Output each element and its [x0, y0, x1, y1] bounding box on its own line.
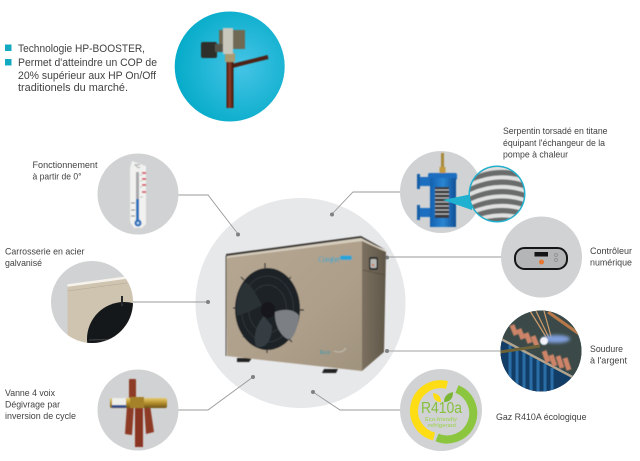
- label: Fonctionnement: [32, 160, 98, 182]
- connector lines: [132, 192, 501, 410]
- top edge: [226, 236, 386, 257]
- control panel: [369, 257, 378, 270]
- label: Carrosserie: [5, 246, 84, 268]
- bullet list: HP-Booster: Technologie HP-BOOSTER,: [18, 43, 145, 55]
- icon: R410a badge: [400, 369, 482, 451]
- fan: [233, 263, 304, 353]
- heat pump unit: [226, 236, 386, 373]
- icon: thermometer circle: [98, 154, 178, 234]
- icon: R410a badge: R410a: [421, 400, 462, 417]
- label: Vanne 4 voix: [5, 388, 76, 421]
- bullet list: HP-Booster: 20% supérieur aux HP On/Off: [18, 70, 157, 82]
- label: Serpentin: [503, 126, 608, 160]
- icon: body panel detail circle: [51, 261, 133, 343]
- icon: R410a badge: refrigerant: [428, 423, 456, 429]
- front panel: [226, 241, 362, 371]
- label: Soudure: Soudure: [590, 344, 623, 354]
- icon: 4-way valve circle: [98, 370, 178, 450]
- label: Gaz R410A: Gaz R410A écologique: [496, 412, 586, 422]
- big background circle: [196, 198, 406, 408]
- side panel: [362, 241, 386, 371]
- feet: [237, 358, 338, 373]
- icon: thermometer circle: °C: [134, 164, 140, 170]
- label: Contrôleur: [590, 246, 632, 268]
- icon: digital controller circle: [501, 216, 582, 298]
- label: Vanne 4 voix: Dégivrage par: [5, 400, 60, 410]
- label: Carrosserie: galvanisé: [5, 258, 42, 268]
- icon: heat exchanger circle: [400, 151, 526, 233]
- icon: silver soldering photo circle: [500, 310, 582, 392]
- bullet list: HP-Booster: Permet d'atteindre un COP de: [18, 57, 157, 69]
- label: Contrôleur: numérique: [590, 258, 632, 268]
- label: Fonctionnement: Fonctionnement: [32, 160, 98, 170]
- label: Serpentin: équipant l'échangeur de la: [503, 138, 606, 148]
- logo: Comfort: [318, 255, 341, 264]
- bullet list: HP-Booster: traditionels du marché.: [18, 82, 128, 94]
- label: Vanne 4 voix: Vanne 4 voix: [5, 388, 55, 398]
- label: Vanne 4 voix: inversion de cycle: [5, 411, 76, 421]
- icon: R410a badge: Eco-friendly: [425, 417, 457, 423]
- label: Carrosserie: Carrosserie en acier: [5, 246, 84, 256]
- icon: teal circle with booster valve: [175, 12, 285, 122]
- label: Serpentin: Serpentin torsadé en titane: [503, 126, 608, 136]
- label: Soudure: à l'argent: [590, 356, 627, 366]
- label: Serpentin: pompe à chaleur: [503, 150, 568, 160]
- label: Fonctionnement: à partir de 0°: [32, 172, 82, 182]
- label: Contrôleur: Contrôleur: [590, 246, 632, 256]
- eco mark: Eco: [320, 350, 331, 356]
- label: Soudure: [590, 344, 627, 366]
- bullet list: HP-Booster: [5, 43, 157, 94]
